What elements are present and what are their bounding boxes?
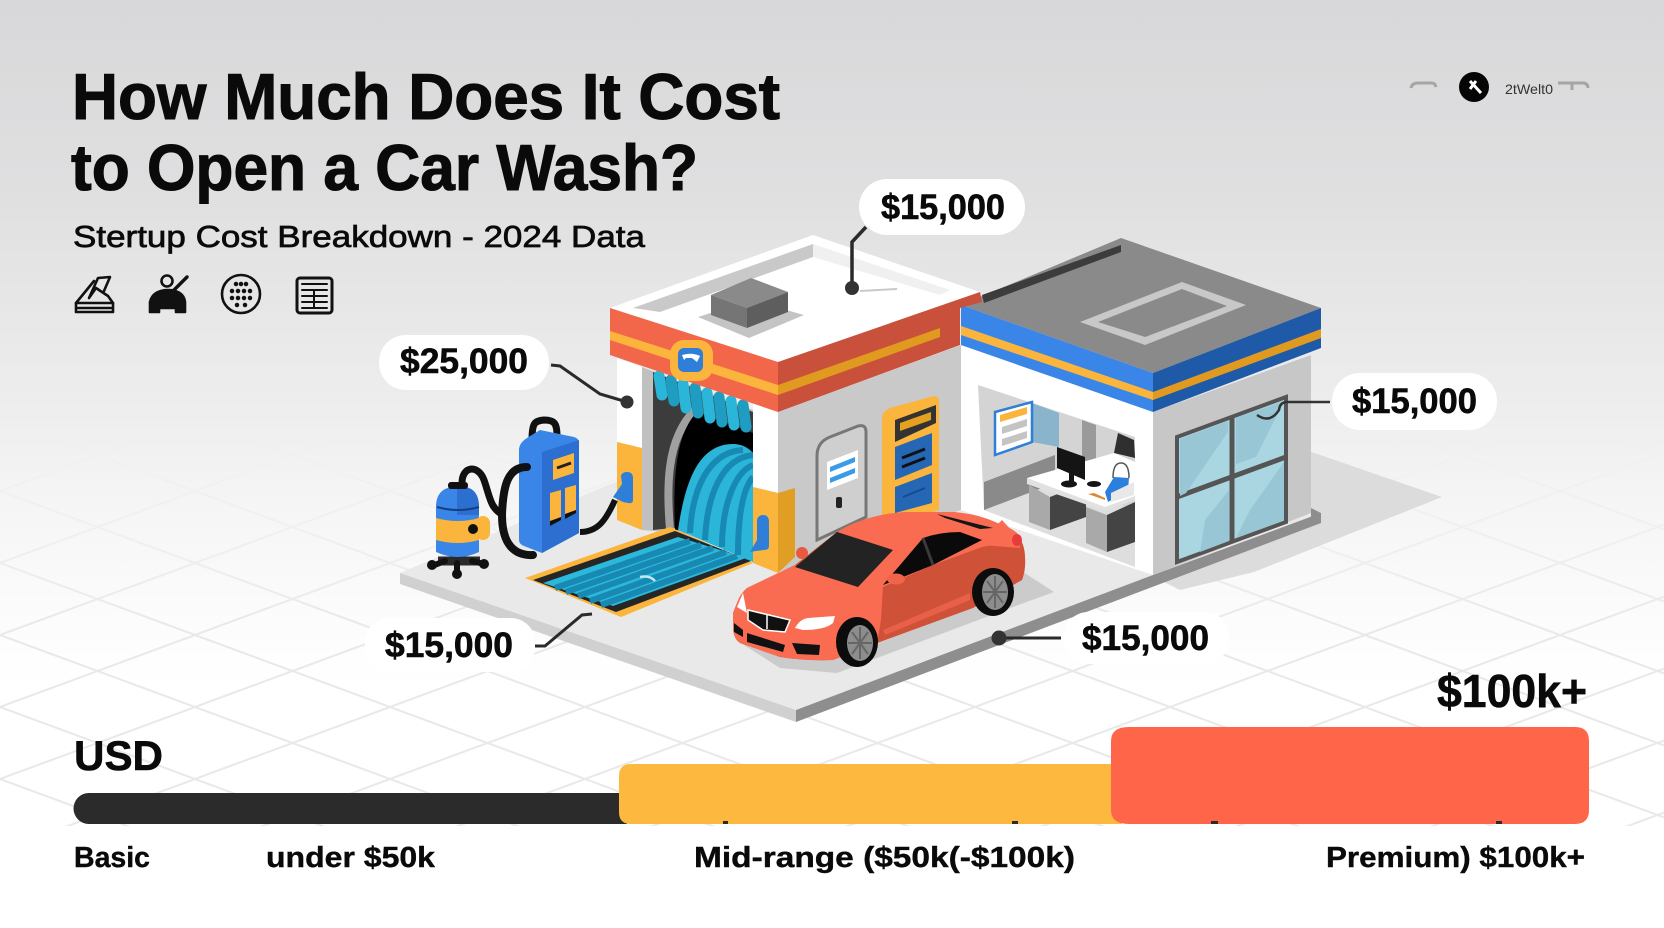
cost tier bar: [74, 727, 1589, 824]
wash bay floor: [525, 527, 753, 617]
mid-range bar: [619, 764, 1122, 824]
icon: car seat person: [150, 276, 187, 312]
premium bar: [1111, 727, 1589, 824]
top-right badge: 2tWelt0: [1505, 81, 1553, 97]
headlights and grille: [734, 534, 1022, 655]
tunnel: [642, 367, 753, 540]
callout: $15,000 window: $15,000: [1352, 382, 1477, 421]
tier labels: [74, 842, 1585, 874]
tier labels: under $50k: [266, 842, 436, 874]
red wash building: [525, 235, 982, 617]
red car: [733, 512, 1025, 667]
car shadow: [736, 570, 1054, 673]
callout: $15,000 forecourt: $15,000: [1082, 619, 1209, 658]
callout: $15,000 roof: $15,000: [881, 188, 1005, 227]
basic bar: [74, 793, 627, 824]
callout: $15,000 wash bay: $15,000: [385, 626, 513, 665]
title: to Open a Car Wash?: [71, 131, 698, 204]
callout: $15,000 roof: [845, 179, 1025, 295]
axis label: USD: USD: [74, 732, 163, 779]
white roof: [610, 235, 980, 362]
payment kiosk: [882, 396, 939, 530]
icon: squeegee: [76, 277, 113, 312]
water ramp: [525, 444, 753, 617]
door: [817, 426, 866, 540]
brush curtain: [659, 376, 746, 427]
wash sign: [670, 340, 713, 381]
tier labels: Mid-range ($50k(-$100k): [694, 842, 1075, 874]
office desk: [1027, 447, 1135, 552]
callout: $25,000 tunnel: [379, 335, 634, 408]
notice board: [995, 402, 1032, 455]
grey roof: [961, 238, 1321, 373]
subtitle: Stertup Cost Breakdown - 2024 Data: [73, 219, 646, 254]
callout: $15,000 forecourt: [992, 612, 1229, 664]
side wall: [778, 345, 961, 572]
blue building: [961, 238, 1321, 575]
icon: table list: [297, 278, 332, 313]
icon: grid globe: [222, 275, 260, 313]
vacuum hose: [462, 469, 503, 515]
vacuum pump: [502, 420, 579, 555]
nozzles and hoses: [580, 472, 769, 552]
top-right badge: [1411, 72, 1588, 102]
ground shadow: [1120, 448, 1442, 590]
callout: $15,000 wash bay: [365, 614, 592, 672]
red fascia: [610, 292, 982, 412]
side windows: [883, 532, 982, 585]
window: [1177, 397, 1286, 562]
callout: $25,000 tunnel: $25,000: [400, 342, 528, 381]
rear wheel: [972, 568, 1014, 616]
windshield: [795, 532, 893, 587]
office room: [978, 385, 1135, 567]
vacuum tank: [427, 482, 490, 579]
car front and roof: [733, 512, 1019, 660]
callout: $15,000 window: [1257, 373, 1497, 430]
blue fascia: [961, 305, 1321, 412]
tier labels: Basic: [74, 842, 150, 874]
front wheel: [836, 617, 878, 667]
illustration: car wash: [400, 235, 1442, 722]
title: How Much Does It Cost: [72, 60, 780, 133]
top tier label: $100k+: [1437, 665, 1587, 717]
title: [71, 60, 780, 204]
tier labels: Premium) $100k+: [1326, 842, 1585, 874]
platform: [400, 480, 1321, 722]
building walls: [961, 345, 1153, 575]
icon row: [76, 275, 332, 313]
pillars: [617, 358, 795, 573]
roof vent: [711, 278, 788, 328]
